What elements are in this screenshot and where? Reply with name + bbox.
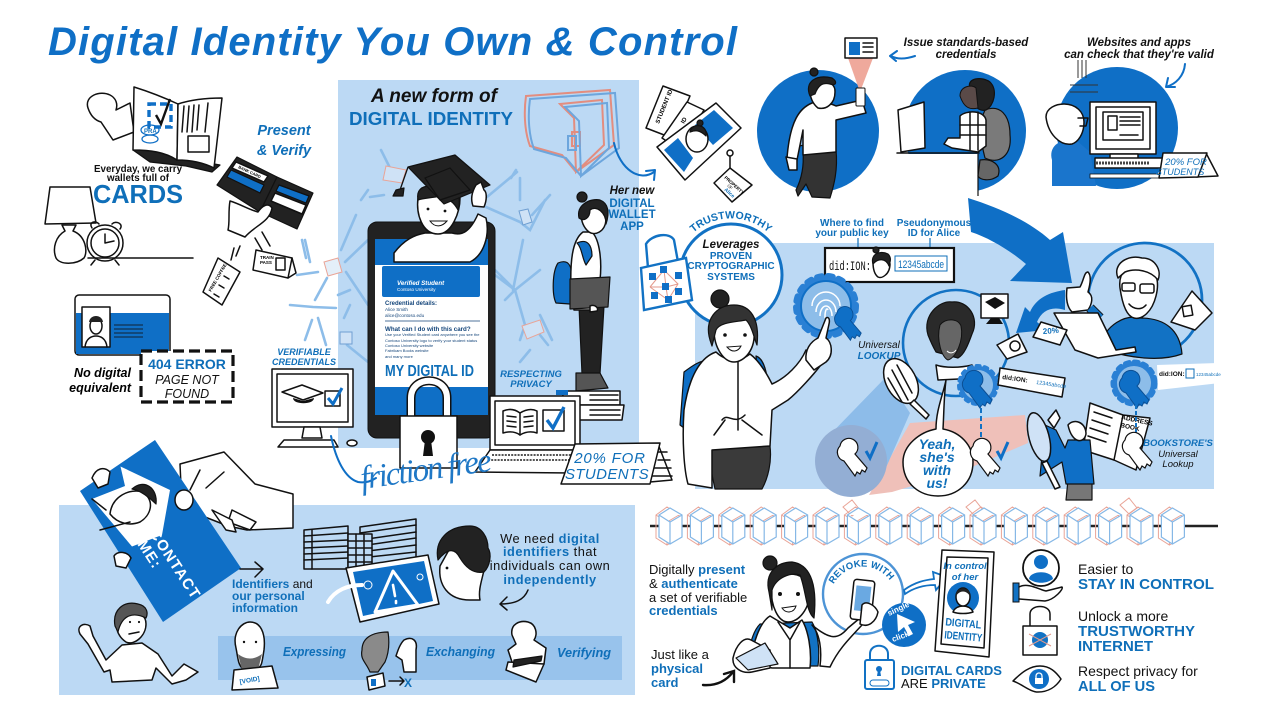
revoke circle: REVOKE WITH: [828, 560, 894, 584]
label: verifying: Verifying: [557, 646, 611, 660]
trustworthy circle: Leverages: [703, 239, 759, 251]
illustration: woman with phone: [757, 58, 879, 198]
credential text: Use your Verified Student card anywhere you see the: [385, 332, 480, 337]
illustration: blue beam: [815, 377, 910, 497]
illustration: wallet app: ID: [681, 116, 689, 125]
text: digital wallet app: APP: [620, 221, 644, 233]
phone: in control of her: IDENTITY: [944, 629, 983, 645]
text: websites and apps: [1064, 37, 1215, 61]
text: identifiers and personal information: Identifiers and: [232, 577, 313, 591]
circle: alice bookstore: [903, 290, 1009, 396]
illustration: wallet app: Alice: [723, 187, 736, 200]
text: universal lookup: Universal: [858, 340, 901, 351]
illustration: rubber stamp: [506, 622, 546, 682]
text: digitally present: credentials: [649, 603, 718, 618]
callout: 404 error: 404 ERROR: [148, 356, 226, 372]
text: stay in control: Easier to: [1078, 561, 1133, 577]
single click button: click: [891, 629, 911, 644]
text: just like a physical card: physical: [651, 661, 703, 676]
icon: monitor: [981, 294, 1008, 324]
speech bubble: us!: [926, 475, 948, 491]
text: bookstore's universal lookup: Lookup: [1162, 459, 1194, 470]
text: digital cards are private: ARE PRIVATE: [901, 676, 986, 691]
illustration: stamp and passport: PRA: [144, 129, 157, 135]
arrow: text to profile: [500, 590, 528, 610]
illustration: woman with phone and card: [733, 556, 878, 672]
icon: network lock: [641, 235, 692, 310]
boots: [576, 373, 608, 391]
icon: credential: [845, 38, 877, 58]
text: present and verify: & Verify: [257, 143, 312, 159]
text: issue credentials: Issue standards-based: [904, 37, 1029, 49]
heading: new form of digital identity: DIGITAL IDENTITY: [349, 109, 513, 129]
text: no digital equivalent: [69, 366, 132, 395]
books: [556, 390, 624, 420]
phone: in control of her: In control: [943, 561, 987, 572]
text: digitally present: & authenticate: [649, 576, 738, 591]
text: present and verify: [257, 123, 312, 159]
title: Digital Identity You Own & Control: [48, 20, 738, 64]
sign: small 20%: STUDENTS: [1156, 167, 1204, 177]
text: identifiers and personal information: [232, 577, 313, 615]
text: we need digital identifiers: [490, 531, 610, 587]
phone: in control of her: of her: [952, 572, 979, 583]
sign: small 20%: [1156, 153, 1218, 178]
legs: [579, 306, 604, 374]
panel: identifiers: [59, 505, 635, 695]
callout: where to find: ID for Alice: [908, 228, 961, 239]
illustration: two people exchanging: X: [404, 676, 412, 690]
heading: new form of digital identity: A new form of: [370, 86, 499, 107]
illustration: safe: [525, 90, 619, 176]
text: bookstore's universal lookup: Universal: [1158, 449, 1199, 460]
network nodes: [324, 166, 544, 344]
trustworthy circle: SYSTEMS: [707, 272, 755, 283]
text: respecting privacy: [500, 369, 562, 390]
phone body: [368, 222, 495, 438]
hair bun: [711, 290, 729, 308]
illustration: dropped cards: FREE COFFEE: [208, 263, 228, 292]
sign: 20% for students: 20% FOR: [573, 450, 646, 467]
key with check: salmon beam: [970, 400, 1008, 476]
jeans: [709, 446, 771, 489]
text: we need digital identifiers: identifiers that: [503, 544, 597, 559]
icon: unlocked globe: [1023, 606, 1057, 655]
text: everyday cards: wallets full of: [106, 173, 170, 184]
seal: key with did tag: [959, 366, 1067, 408]
arrow: exchange: [1016, 290, 1065, 333]
did box: [825, 247, 954, 282]
trustworthy circle: CRYPTOGRAPHIC: [687, 261, 775, 272]
text: respect privacy: Respect privacy for: [1078, 663, 1198, 679]
illustration: salmon beam: [869, 415, 1028, 495]
illustration: buildings: [304, 519, 416, 569]
text: digitally present: Digitally present: [649, 562, 746, 577]
illustration: wallet app: [646, 86, 752, 202]
arrow: card to identifiers: [240, 562, 263, 577]
text: identifiers and personal information: our personal: [232, 589, 305, 603]
callout: 404 error: PAGE NOT: [155, 373, 220, 387]
backpack strap: [680, 360, 710, 440]
illustration: bearded man: [232, 622, 278, 690]
key with check: blue beam: [837, 438, 877, 476]
text: trustworthy internet: INTERNET: [1078, 638, 1153, 655]
text: bookstore's universal lookup: [1143, 438, 1213, 470]
sign: small 20%: 20% FOR: [1164, 157, 1207, 168]
verified student card: Verified Student: [397, 280, 445, 287]
text: trustworthy internet: Unlock a more: [1078, 608, 1168, 624]
text: we need digital identifiers: We need digital: [500, 531, 600, 546]
text: respecting privacy: PRIVACY: [510, 379, 553, 390]
text: trustworthy internet: TRUSTWORTHY: [1078, 623, 1195, 640]
icon: person in hand: [1013, 550, 1062, 602]
contact card: [80, 440, 241, 622]
illustration: woman profile: [437, 526, 490, 600]
text: websites and apps: Websites and apps: [1087, 37, 1191, 49]
did box: 12345abcde: [898, 259, 944, 271]
did box: did:ION:: [829, 259, 871, 274]
monitor: verifiable credentials: VERIFIABLE: [277, 347, 332, 357]
lock: [400, 381, 457, 468]
magnifying glass: [876, 353, 929, 419]
illustration: laptop and 20 percent card: 20%: [1043, 326, 1059, 336]
illustration: wallet app: STUDENT ID: [655, 89, 675, 125]
monitor: verifiable credentials: [272, 347, 357, 447]
head: [714, 313, 754, 362]
credential text: Fabrikam Books website: [385, 348, 429, 353]
seal: key with did tag: 12345abcde: [1036, 380, 1067, 390]
callout: where to find: Pseudonymous: [897, 218, 972, 229]
text: bookstore's universal lookup: BOOKSTORE'S: [1143, 438, 1213, 449]
text: no digital equivalent: equivalent: [69, 381, 132, 395]
text: stay in control: STAY IN CONTROL: [1078, 576, 1214, 593]
illustration: two people exchanging: [362, 632, 416, 690]
trustworthy circle: TRUSTWORTHY: [689, 211, 773, 232]
text: universal lookup: LOOKUP: [858, 351, 901, 362]
icon: eye with lock: [1013, 666, 1061, 692]
blockchain: [650, 498, 1218, 545]
text: digital wallet app: Her new: [610, 185, 655, 197]
illustration: hand holding contact card: [80, 440, 293, 622]
big arrow: [968, 198, 1072, 283]
text: issue credentials: [904, 37, 1029, 61]
text: digitally present: [649, 562, 747, 618]
panel: new form of digital identity: [338, 80, 639, 448]
text: universal lookup: [858, 340, 901, 362]
credential text: Contoso University website: [385, 343, 434, 348]
phone: in control of her: [935, 550, 994, 657]
illustration: thumbs up: [1067, 272, 1100, 318]
phone screen: [375, 239, 488, 415]
arrow: websites: [1166, 64, 1185, 87]
arrow: physical card: [703, 671, 734, 685]
circle: verifier man: [1088, 243, 1202, 358]
panel: trustworthy lookup: [695, 243, 1214, 489]
illustration: wallet in hand: [217, 157, 313, 260]
seal: bookstore key: 12345abcde: [1196, 372, 1221, 377]
icon: private lock: [865, 646, 894, 689]
backpack: [553, 262, 572, 304]
callout: where to find: Where to find: [820, 218, 884, 229]
revoke circle: [822, 552, 904, 636]
text: digital wallet app: WALLET: [608, 209, 656, 221]
speech bubble: Yeah,: [919, 436, 955, 452]
band: expressing exchanging verifying: [218, 636, 622, 680]
text: just like a physical card: [651, 647, 710, 690]
illustration: ID card: [75, 295, 170, 355]
hoodie: [571, 232, 601, 310]
presenting woman: [680, 290, 831, 489]
callout: where to find: [815, 218, 972, 256]
pointing hand: [806, 317, 831, 370]
head: [581, 204, 606, 234]
contact card: ME:: [134, 537, 165, 572]
graduate figure: [393, 155, 490, 262]
text: digitally present: a set of verifiable: [649, 590, 747, 605]
text: present and verify: Present: [257, 123, 312, 139]
text: everyday cards: [93, 164, 183, 209]
seal: bookstore key: did:ION:: [1159, 371, 1185, 378]
hoodie: [683, 350, 820, 488]
illustration: dropped cards: TRAIN: [260, 255, 274, 260]
credential text: Alice Smith: [385, 307, 408, 312]
illustration: shrugging man: [79, 603, 198, 684]
illustration: bookstore man: ADDRESS: [1121, 414, 1154, 428]
verified student card: Contoso University: [397, 287, 436, 292]
speech bubble: [903, 380, 973, 496]
arrow: information to tablet: [328, 585, 362, 602]
callout: 404 error: FOUND: [165, 387, 209, 401]
seal: key with did tag: did:ION:: [1002, 374, 1028, 385]
seal: bookstore key: [1113, 362, 1221, 408]
contact card: CONTACT: [146, 526, 204, 603]
standing woman with wallet: [553, 192, 610, 391]
illustration: dropped cards: PASS: [260, 260, 272, 265]
arrow: safe to wallet: [614, 143, 655, 180]
trustworthy circle: PROVEN: [710, 251, 752, 262]
credential text: [385, 301, 480, 359]
illustration: man at monitor: [1046, 60, 1178, 189]
text: just like a physical card: Just like a: [651, 647, 710, 662]
illustration: bookstore man: [1023, 403, 1154, 500]
single click button: single: [886, 600, 911, 618]
illustration: lamp and clock: [45, 187, 193, 265]
text: identifiers and personal information: information: [232, 601, 298, 615]
text: my digital id: MY DIGITAL ID: [385, 363, 474, 380]
arrow: revoke to phone: [904, 572, 947, 594]
icon: book cube: [1171, 291, 1212, 330]
illustration: bearded man: [VOID]: [239, 676, 260, 686]
sign: 20% for students: [561, 443, 672, 484]
icon: camera cube: [997, 334, 1027, 359]
laptop: respecting privacy: [475, 396, 580, 473]
text: websites and apps: can check that they're valid: [1064, 49, 1215, 61]
arrow: issue credentials: [890, 51, 915, 61]
credential text: What can I do with this card?: [385, 326, 471, 333]
illustration: wallet in hand: BANK CARD: [238, 164, 262, 179]
text: just like a physical card: card: [651, 675, 679, 690]
trustworthy circle: [681, 211, 784, 322]
illustration: stamp and passport: [87, 87, 222, 172]
tablet: [570, 277, 610, 309]
text: respecting privacy: RESPECTING: [500, 369, 562, 380]
text: everyday cards: Everyday, we carry: [94, 164, 183, 175]
illustration: bookstore man: BOOK: [1120, 422, 1140, 433]
network lines: [290, 150, 552, 362]
text: respect privacy: [1078, 663, 1198, 695]
illustration: wallet app: PROPERTY: [723, 175, 745, 195]
verified student card: [382, 266, 480, 297]
sign: 20% for students: STUDENTS: [565, 466, 649, 483]
label: exchanging: Exchanging: [426, 645, 495, 659]
single click button: [882, 600, 926, 647]
illustration: dropped cards: [203, 250, 296, 305]
credential text: Contoso University logo to verify your student status: [385, 338, 477, 343]
heading: new form of digital identity: [349, 86, 513, 129]
speech bubble: with: [923, 462, 951, 478]
script: friction free: friction free: [358, 443, 494, 497]
credential text: and many more: [385, 354, 414, 359]
text: everyday cards: CARDS: [93, 179, 183, 209]
text: we need digital identifiers: individuals can own: [490, 558, 610, 573]
text: stay in control: [1078, 561, 1214, 593]
text: we need digital identifiers: independently: [503, 572, 597, 587]
credential text: Credential details:: [385, 301, 437, 307]
text: digital wallet app: DIGITAL: [609, 198, 655, 210]
illustration: wallet app: OF: [726, 183, 734, 191]
credential text: alice@contoso.edu: [385, 313, 425, 318]
callout: 404 error: [141, 351, 233, 402]
text: trustworthy internet: [1078, 608, 1195, 655]
illustration: issuer at desk: [897, 70, 1026, 197]
seal: fingerprint and key: [796, 276, 861, 340]
text: issue credentials: credentials: [936, 49, 996, 61]
illustration: laptop and 20 percent card: [1033, 313, 1136, 358]
callout: where to find: your public key: [815, 228, 889, 239]
monitor: verifiable credentials: CREDENTIALS: [272, 357, 336, 367]
speech bubble: she's: [919, 449, 955, 465]
text: digital cards are private: [901, 663, 1002, 691]
phone with graduate: [368, 155, 495, 438]
label: expressing: Expressing: [283, 645, 346, 659]
text: respect privacy: ALL OF US: [1078, 678, 1155, 695]
text: digital cards are private: DIGITAL CARDS: [901, 663, 1002, 678]
text: no digital equivalent: No digital: [74, 366, 132, 380]
illustration: tablet warning: [346, 555, 439, 622]
text: digital wallet app: [608, 185, 656, 233]
phone: in control of her: DIGITAL: [945, 616, 982, 632]
